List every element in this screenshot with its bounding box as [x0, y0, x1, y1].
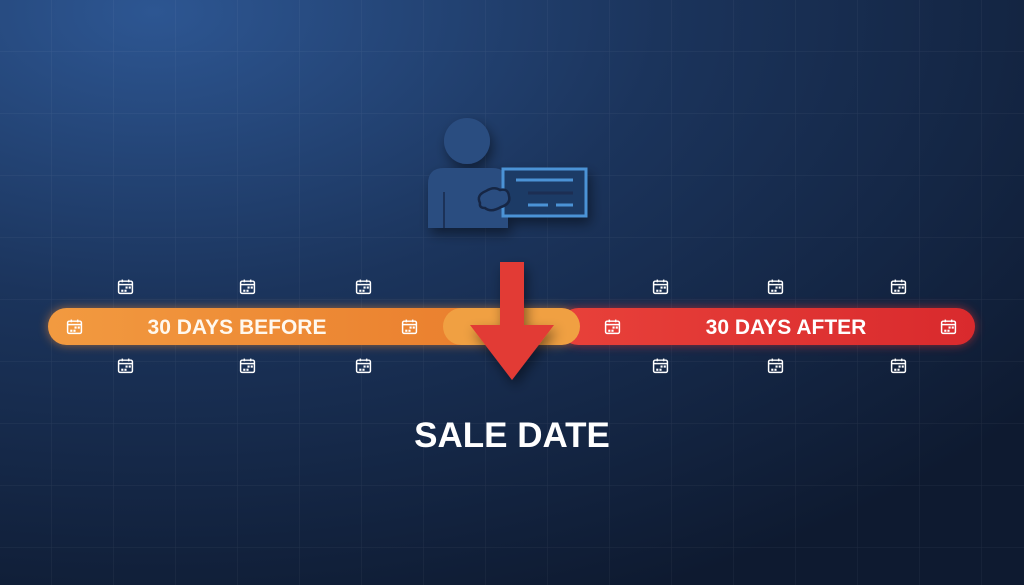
icon: person with card	[428, 118, 586, 228]
arrow: sale date marker	[470, 262, 554, 380]
highlight pill at sale date	[443, 308, 580, 345]
bar: 30 days before	[48, 308, 578, 345]
label: sale date: SALE DATE	[414, 416, 610, 455]
bar: 30 days before: 30 DAYS BEFORE	[148, 316, 326, 339]
calendar icons row below	[119, 359, 905, 372]
calendar icons row above	[119, 280, 905, 293]
bar: 30 days after: 30 DAYS AFTER	[706, 316, 866, 339]
bar: 30 days after	[560, 308, 975, 345]
